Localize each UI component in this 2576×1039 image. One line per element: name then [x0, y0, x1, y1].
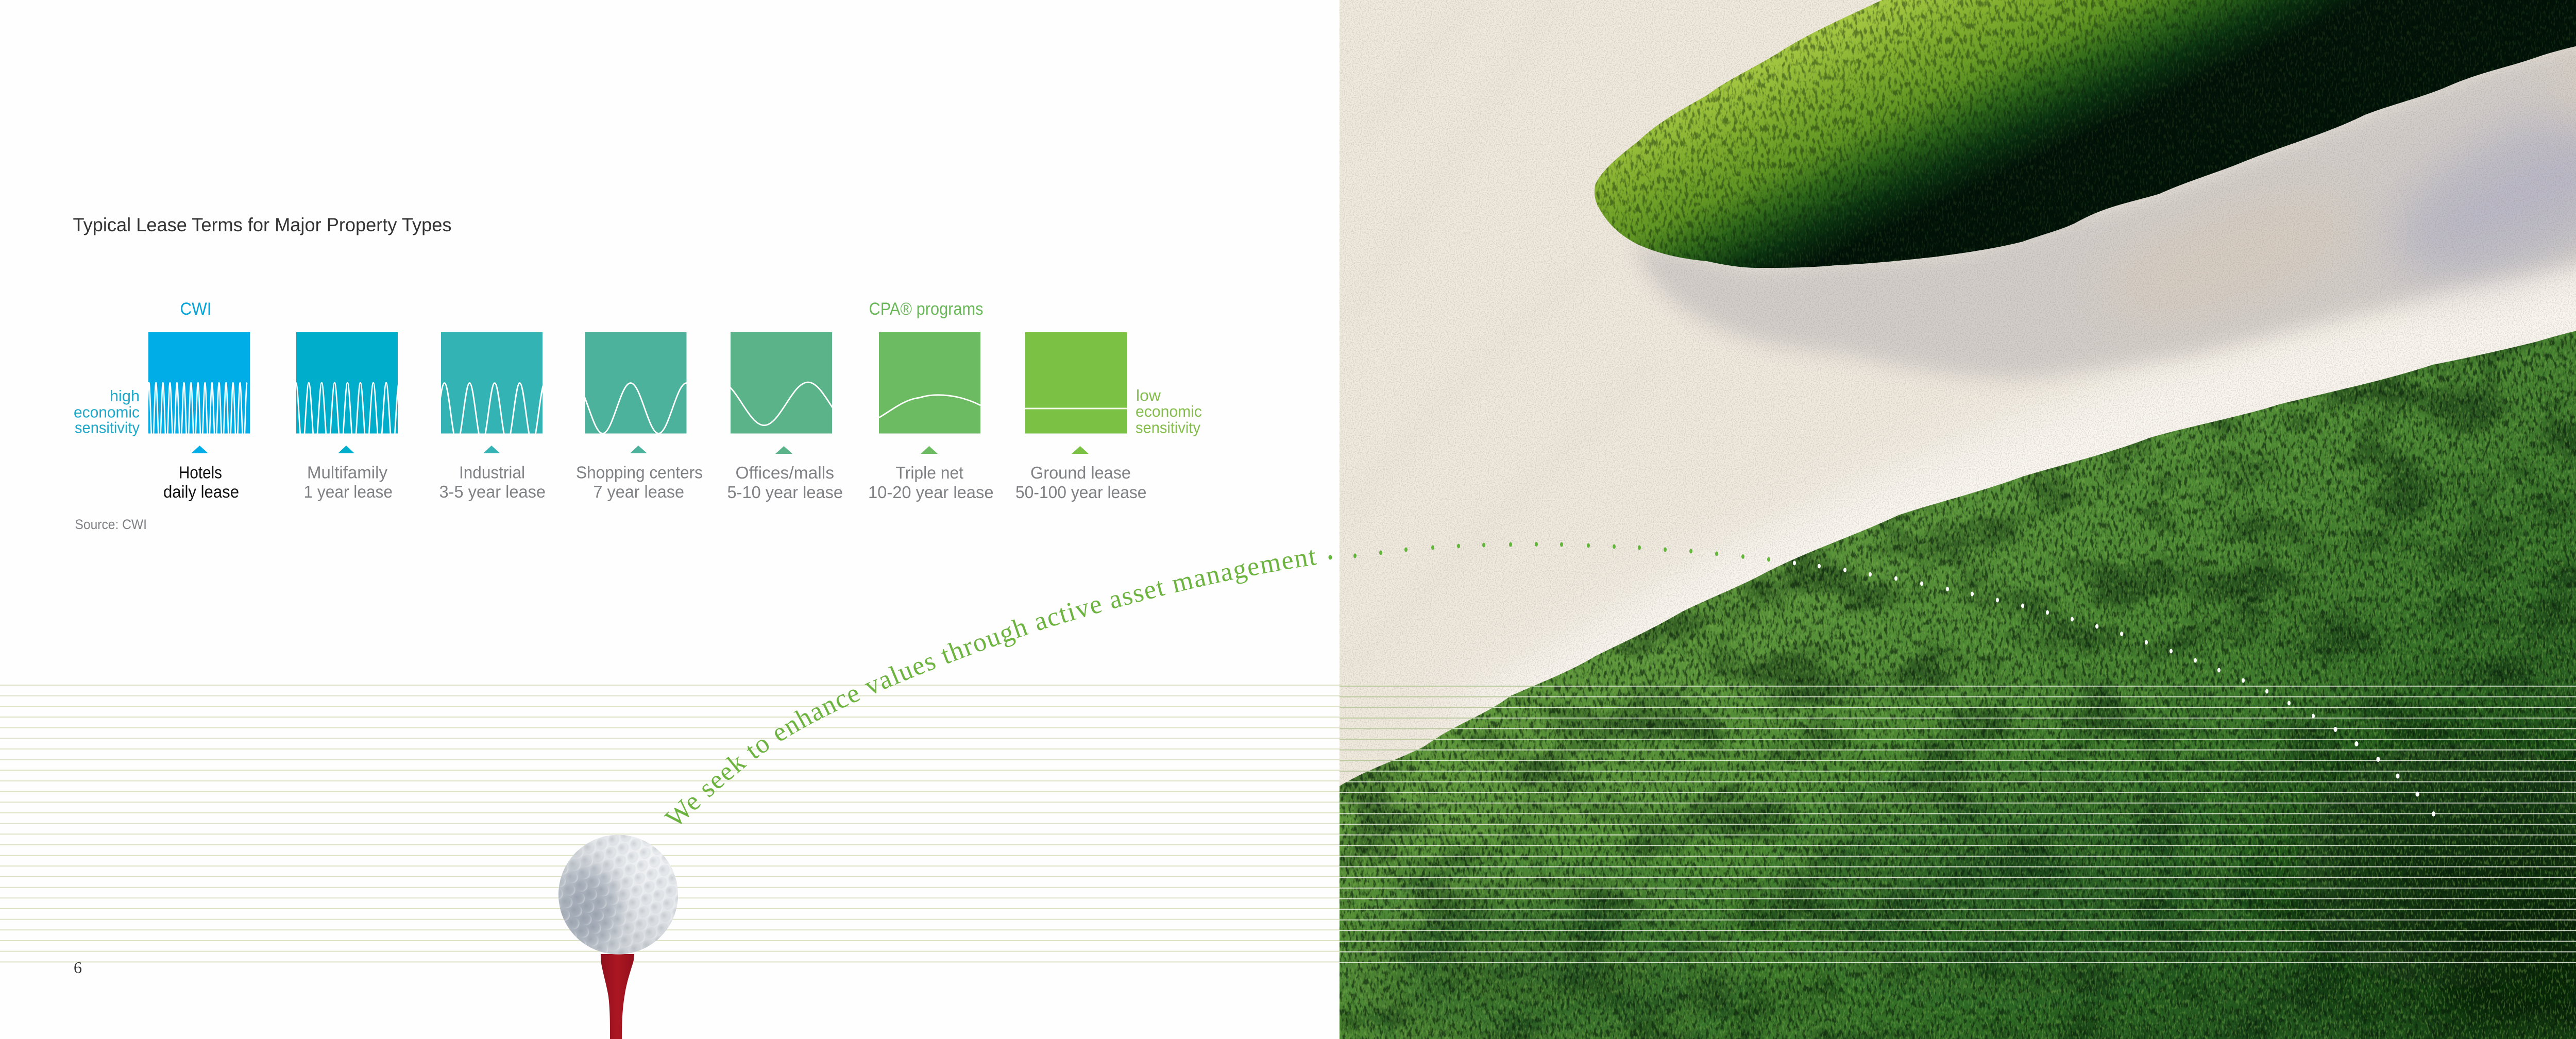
- photo: golf bunker and grass: [1340, 0, 2576, 1039]
- axis label: low economic sensitivity: sensitivity: [1136, 418, 1200, 437]
- heading: CPA programs: CPA® programs: [869, 299, 983, 319]
- item: Triple net: [868, 332, 993, 502]
- page number: 6: [74, 958, 82, 977]
- item: Ground lease: 50-100 year lease: [1015, 483, 1147, 502]
- sand: blue shadow tint: [2367, 69, 2576, 312]
- ruled lines over grass: [1340, 686, 2576, 962]
- item: Multifamily: Multifamily: [307, 463, 387, 482]
- sand: grain texture: [1340, 0, 2576, 824]
- mound: dark upper grass: [1571, 0, 2576, 278]
- dotted ball trajectory: green over sand: [1328, 542, 1770, 561]
- item: Triple net: Triple net: [895, 463, 963, 482]
- axis label: high economic sensitivity: economic: [74, 403, 140, 421]
- item: Multifamily: [296, 332, 399, 501]
- sand: raked marks: [1345, 0, 1649, 670]
- axis label: high economic sensitivity: sensitivity: [75, 418, 140, 437]
- golf ball: [555, 834, 678, 955]
- item: Multifamily: 1 year lease: [304, 482, 393, 501]
- title: Typical Lease Terms for Major Property Types: [73, 214, 451, 235]
- item: Offices/malls: [720, 332, 852, 502]
- axis label: low economic sensitivity: [1136, 386, 1202, 437]
- axis label: high economic sensitivity: high: [110, 387, 140, 405]
- item: Triple net: 10-20 year lease: [868, 483, 993, 502]
- lower grass slope: [1340, 288, 2576, 1039]
- source note: Source: CWI: [75, 517, 147, 532]
- item: Hotels: [142, 332, 250, 501]
- item: Shopping centers: 7 year lease: [594, 482, 684, 501]
- axis label: high economic sensitivity: [74, 387, 140, 437]
- sand: shadow under mound: [1633, 15, 2576, 379]
- item: Shopping centers: [575, 332, 703, 501]
- item: Hotels: Hotels: [179, 463, 222, 482]
- golf tee: [601, 954, 634, 1039]
- axis label: low economic sensitivity: low: [1136, 386, 1161, 404]
- sand: bright band beside lower grass: [1432, 242, 2576, 747]
- item: Industrial: 3-5 year lease: [439, 482, 546, 501]
- heading: CWI: CWI: [180, 299, 211, 319]
- sand: upper right tan patch: [2550, 46, 2576, 129]
- item: Ground lease: [1015, 332, 1147, 502]
- panel: lease term chart: [74, 299, 1202, 532]
- dotted ball trajectory: white over grass: [1793, 560, 2435, 816]
- sand: tan patch: [2090, 175, 2372, 340]
- item: Industrial: Industrial: [459, 463, 525, 482]
- item: Hotels: daily lease: [163, 482, 239, 501]
- item: Offices/malls: Offices/malls: [736, 463, 834, 482]
- item: Shopping centers: Shopping centers: [576, 463, 703, 482]
- ruled lines: left page: [0, 685, 1340, 962]
- item: Industrial: [419, 332, 546, 501]
- axis label: low economic sensitivity: economic: [1136, 402, 1202, 420]
- item: Ground lease: Ground lease: [1030, 463, 1131, 482]
- curved tagline: We seek to enhance values through active asset management: [664, 550, 1317, 824]
- item: Offices/malls: 5-10 year lease: [727, 483, 843, 502]
- ruled lines over sand: [1340, 686, 1597, 771]
